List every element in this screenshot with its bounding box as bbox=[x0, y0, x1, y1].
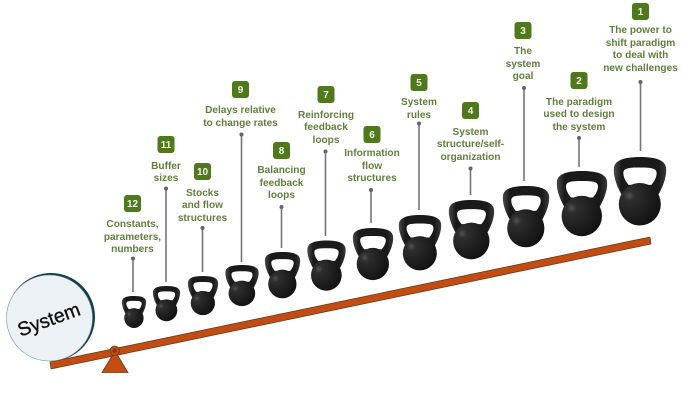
item 4 bbox=[437, 102, 504, 259]
item 4: System bbox=[453, 127, 488, 138]
item 10: Stocks bbox=[186, 188, 219, 199]
item 5: 5 bbox=[416, 78, 422, 89]
item 6: flow bbox=[362, 161, 382, 172]
item 2: used to design bbox=[543, 109, 615, 120]
fulcrum bbox=[102, 346, 128, 372]
item 8: 8 bbox=[279, 146, 285, 157]
item 10: 10 bbox=[197, 167, 208, 178]
kettlebell 12 bbox=[122, 296, 146, 328]
item 12: parameters, bbox=[104, 232, 161, 243]
item 3: system bbox=[506, 59, 540, 70]
item 4: organization bbox=[440, 152, 501, 163]
system circle bbox=[6, 273, 95, 361]
system label: System bbox=[15, 299, 83, 341]
item 5 bbox=[399, 74, 441, 270]
item 2 bbox=[543, 72, 615, 236]
item 12: numbers bbox=[111, 244, 154, 255]
item 6: Information bbox=[344, 148, 400, 159]
item 6 bbox=[344, 126, 400, 280]
item 12: Constants, bbox=[106, 219, 159, 230]
item 6: 6 bbox=[369, 130, 375, 141]
item 12 bbox=[104, 195, 161, 328]
item 9: Delays relative bbox=[205, 105, 276, 116]
item 10: and flow bbox=[182, 200, 223, 211]
item 7 bbox=[298, 86, 354, 291]
item 9: 9 bbox=[238, 85, 244, 96]
item 10: structures bbox=[178, 213, 228, 224]
item 5: System bbox=[401, 97, 437, 108]
kettlebell 6 bbox=[353, 228, 393, 280]
item 2: 2 bbox=[576, 76, 582, 87]
item 10 bbox=[178, 163, 228, 315]
item 1 bbox=[603, 3, 678, 225]
item 6: structures bbox=[347, 173, 397, 184]
item 1: to deal with bbox=[613, 50, 668, 61]
item 7: loops bbox=[313, 135, 340, 146]
item 3: The bbox=[514, 46, 532, 57]
item 11: Buffer bbox=[151, 161, 181, 172]
item 12: 12 bbox=[127, 199, 138, 210]
item 1: shift paradigm bbox=[606, 38, 675, 49]
kettlebell 1 bbox=[614, 157, 666, 225]
kettlebell 8 bbox=[265, 252, 300, 298]
item 3 bbox=[503, 22, 549, 247]
kettlebell 11 bbox=[153, 286, 180, 321]
item 7: 7 bbox=[323, 90, 329, 101]
item 1: 1 bbox=[638, 7, 644, 18]
item 7: Reinforcing bbox=[298, 110, 354, 121]
item 1: The power to bbox=[609, 25, 672, 36]
item 1: new challenges bbox=[603, 63, 678, 74]
item 9 bbox=[203, 81, 278, 306]
item 8: loops bbox=[268, 190, 295, 201]
item 8: feedback bbox=[260, 178, 304, 189]
item 5: rules bbox=[407, 110, 431, 121]
item 9: to change rates bbox=[203, 118, 278, 129]
item 8 bbox=[257, 142, 306, 298]
kettlebell 7 bbox=[307, 240, 346, 291]
item 11: sizes bbox=[154, 173, 179, 184]
item 2: the system bbox=[553, 122, 605, 133]
kettlebell 9 bbox=[225, 265, 259, 306]
item 8: Balancing bbox=[257, 165, 306, 176]
item 11 bbox=[151, 136, 181, 321]
item 11: 11 bbox=[161, 140, 172, 151]
item 2: The paradigm bbox=[546, 97, 612, 108]
item 3: goal bbox=[513, 71, 534, 82]
item 3: 3 bbox=[520, 26, 526, 37]
kettlebell 3 bbox=[503, 186, 549, 247]
kettlebell 5 bbox=[399, 215, 441, 270]
item 4: 4 bbox=[468, 106, 474, 117]
item 4: structure/self- bbox=[437, 139, 504, 150]
kettlebell 2 bbox=[557, 171, 607, 236]
beam bbox=[50, 237, 651, 369]
kettlebell 4 bbox=[449, 200, 494, 259]
item 7: feedback bbox=[304, 122, 348, 133]
kettlebell 10 bbox=[188, 276, 218, 315]
